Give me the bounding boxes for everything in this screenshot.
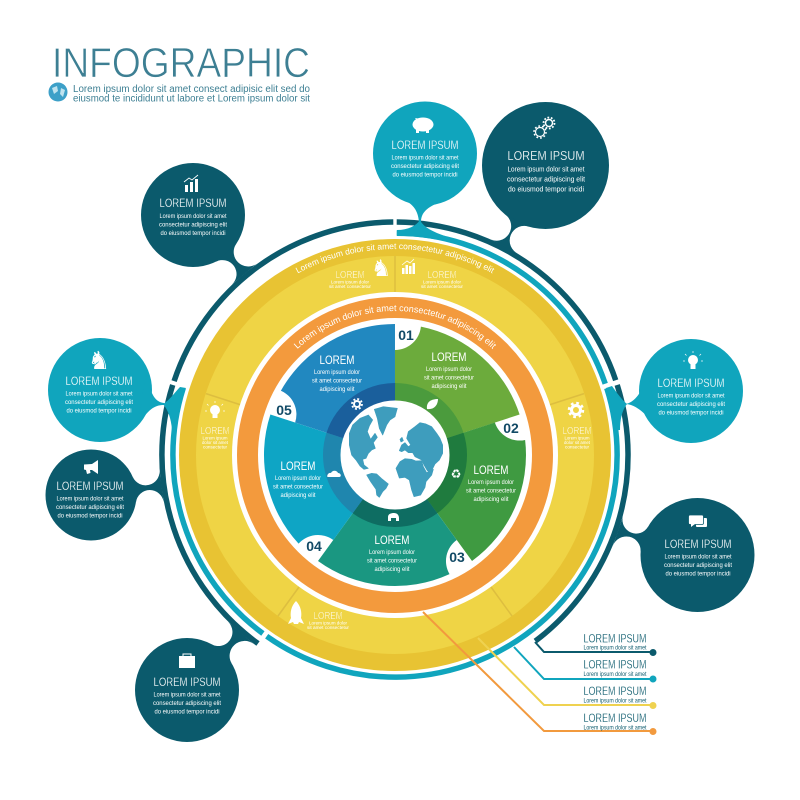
slice 01 text	[424, 350, 474, 390]
outer yellow ring	[179, 239, 611, 671]
bubble: top left growth: Lorem ipsum dolor sit amet	[160, 214, 227, 220]
orange ring curved text: Lorem ipsum dolor sit amet consectetur adipiscing elit	[294, 305, 496, 350]
bubble: top right gears: LOREM IPSUM	[508, 148, 584, 163]
slice 01 text: adipiscing elit	[432, 383, 467, 390]
bubble: top left growth: LOREM IPSUM	[160, 198, 226, 210]
legend labels: Lorem ipsum dolor sit amet	[584, 726, 647, 732]
yellow segment: idea: dolor sit amet	[202, 440, 229, 445]
slice 04 text	[273, 459, 323, 499]
bubble: right light bulb: consectetur adipiscing elit	[657, 402, 725, 408]
yellow segment: settings: Lorem ipsum	[564, 436, 590, 440]
slice 04	[219, 382, 395, 559]
slice 01	[395, 327, 520, 455]
yellow segment: growth: Lorem ipsum dolor	[423, 280, 462, 284]
legend labels: LOREM IPSUM	[584, 634, 646, 646]
slice 04 text: LOREM	[280, 459, 316, 473]
slice 05 text: LOREM	[320, 353, 354, 367]
inner ring icons: ♻	[451, 467, 461, 481]
legend labels	[584, 634, 647, 732]
legend labels: LOREM IPSUM	[584, 713, 646, 725]
bubble: bottom left briefcase: LOREM IPSUM	[154, 677, 220, 689]
bubble: bottom left briefcase: consectetur adipiscing elit	[153, 701, 221, 707]
bubble: left megaphone: LOREM IPSUM	[56, 481, 124, 493]
yellow segment: strategy: ♞	[371, 256, 391, 282]
legend labels: Lorem ipsum dolor sit amet	[584, 672, 647, 678]
bubble: right chat: LOREM IPSUM	[664, 539, 732, 551]
bubble: top left growth: do eiusmod tempor incidi	[160, 231, 226, 237]
yellow segment: settings: dolor sit amet	[564, 440, 591, 445]
subtitle text: Lorem ipsum dolor sit amet consect adipisic elit sed do	[73, 84, 310, 95]
bubble: right light bulb: do eiusmod tempor incidi	[658, 410, 724, 416]
slice 03 text: sit amet consectetur	[367, 558, 417, 564]
pie chart	[219, 297, 556, 632]
slice 01 text: Lorem ipsum dolor	[426, 366, 472, 373]
yellow segment: strategy: Lorem ipsum dolor	[331, 280, 370, 284]
bubble: top right gears: Lorem ipsum dolor sit amet	[508, 166, 585, 174]
slice 05 text	[312, 353, 362, 393]
slice 02 text: adipiscing elit	[474, 496, 509, 503]
slice numbers: 01	[398, 327, 414, 343]
bubble: left chess knight: ♞	[88, 346, 110, 375]
bubble: left chess knight: LOREM IPSUM	[66, 376, 132, 388]
yellow segment: idea: Lorem ipsum	[202, 436, 228, 440]
yellow segment: strategy: LOREM	[336, 270, 364, 281]
slice numbers: 03	[449, 549, 465, 565]
legend labels: LOREM IPSUM	[584, 660, 646, 672]
legend labels: LOREM IPSUM	[584, 686, 646, 698]
orange ring	[248, 308, 542, 602]
yellow segment: idea: consectetur	[203, 444, 228, 450]
slice 03 text: Lorem ipsum dolor	[369, 549, 415, 556]
slice 05 text: Lorem ipsum dolor	[314, 369, 360, 376]
bubble: top piggy bank: Lorem ipsum dolor sit amet	[392, 156, 459, 162]
bubble: right chat	[613, 498, 754, 612]
slice 03	[294, 455, 470, 632]
yellow segment: launch	[288, 601, 350, 630]
bubble: top right gears: do eiusmod tempor incidi	[508, 186, 584, 194]
bubble: left megaphone	[46, 450, 164, 540]
slice numbers: 02	[503, 420, 519, 436]
slice 02 text	[466, 463, 516, 503]
yellow ring segment dividers	[206, 256, 584, 616]
bubble: left megaphone: Lorem ipsum dolor sit amet	[56, 496, 124, 502]
slice 03 text: LOREM	[374, 533, 410, 547]
yellow segment: growth: LOREM	[428, 270, 456, 281]
icon: small globe	[48, 82, 68, 102]
yellow segment: growth: sit amet consectetur	[421, 284, 464, 289]
yellow segment: settings: consectetur	[565, 444, 590, 450]
leader end dots	[650, 649, 656, 735]
yellow segment: launch: sit amet consectetur	[307, 625, 350, 630]
yellow segment: idea	[200, 401, 230, 450]
yellow segment: settings	[562, 403, 592, 450]
yellow ring curved text: Lorem ipsum dolor sit amet consectetur adipiscing elit	[296, 244, 494, 274]
bubble: right chat: consectetur adipiscing elit	[664, 563, 732, 569]
slice 01 text: LOREM	[432, 350, 466, 364]
slice 01 text: sit amet consectetur	[424, 374, 474, 382]
slice 02 text: Lorem ipsum dolor	[468, 479, 514, 486]
bubble: right light bulb: LOREM IPSUM	[658, 378, 724, 390]
yellow segment: strategy	[329, 256, 391, 289]
subtitle text: eiusmod te incididunt ut labore et Lorem ipsum dolor sit	[73, 94, 310, 104]
slice 04 text: Lorem ipsum dolor	[275, 475, 321, 482]
slice 05	[273, 297, 434, 455]
slice 05 text: adipiscing elit	[320, 386, 355, 393]
bubble: top left growth: consectetur adipiscing elit	[159, 222, 227, 228]
legend labels: Lorem ipsum dolor sit amet	[584, 646, 647, 652]
bubble: right light bulb	[626, 339, 743, 443]
slice 02	[395, 415, 556, 574]
slice 02 text: LOREM	[474, 463, 508, 477]
slice numbers: 04	[306, 538, 322, 554]
slice 02 text: sit amet consectetur	[466, 488, 516, 494]
bubble: top piggy bank: do eiusmod tempor incidi	[392, 172, 458, 178]
bubble: top piggy bank: LOREM IPSUM	[392, 140, 458, 152]
yellow segment: settings: LOREM	[562, 426, 592, 437]
bubble: right chat: do eiusmod tempor incidi	[666, 572, 730, 578]
slice 04 text: sit amet consectetur	[273, 484, 323, 490]
bubble: top left growth	[141, 163, 257, 284]
slice numbers: 05	[276, 402, 292, 418]
slice 04 text: adipiscing elit	[280, 492, 316, 499]
bubble: right chat: Lorem ipsum dolor sit amet	[664, 554, 732, 560]
bubble: left chess knight	[48, 338, 164, 442]
bubble: bottom left briefcase	[135, 622, 253, 742]
inner ring icons	[327, 399, 461, 521]
bubble: top piggy bank: consectetur adipiscing elit	[391, 164, 459, 170]
yellow segment: growth	[402, 259, 464, 289]
yellow segment: launch: Lorem ipsum dolor	[309, 620, 348, 626]
teal outer arcs	[173, 233, 617, 677]
slice 05 text: sit amet consectetur	[312, 378, 362, 384]
subtitle text	[73, 84, 310, 104]
bubble: bottom left briefcase: do eiusmod tempor incidi	[154, 710, 220, 716]
bubble: bottom left briefcase: Lorem ipsum dolor sit amet	[154, 692, 221, 698]
legend labels: Lorem ipsum dolor sit amet	[584, 698, 647, 704]
bubble: right light bulb: Lorem ipsum dolor sit amet	[658, 394, 725, 400]
bubble: top piggy bank	[373, 102, 477, 222]
bubble: left megaphone: do eiusmod tempor incidi	[58, 514, 122, 520]
inner ring sectors	[297, 368, 485, 554]
leader lines	[423, 612, 653, 731]
bubble: top right gears: consectetur adipiscing elit	[507, 176, 585, 184]
bubble: top right gears	[482, 102, 609, 254]
slice 03 text: adipiscing elit	[374, 566, 410, 573]
yellow segment: strategy: sit amet consectetur	[329, 284, 372, 289]
teal arc flares	[163, 220, 627, 430]
bubble: left chess knight: Lorem ipsum dolor sit amet	[66, 392, 133, 398]
title: INFOGRAPHIC	[52, 39, 310, 86]
dark outer arcs	[162, 222, 628, 644]
bubble: left megaphone: consectetur adipiscing elit	[56, 505, 124, 511]
bubble: left chess knight: do eiusmod tempor incidi	[66, 408, 132, 414]
slice numbers	[276, 327, 519, 565]
globe	[340, 400, 450, 510]
slice 03 text	[367, 533, 417, 573]
yellow segment: idea: LOREM	[200, 426, 230, 437]
yellow segment: launch: LOREM	[314, 611, 342, 622]
bubble: left chess knight: consectetur adipiscing elit	[65, 400, 133, 406]
